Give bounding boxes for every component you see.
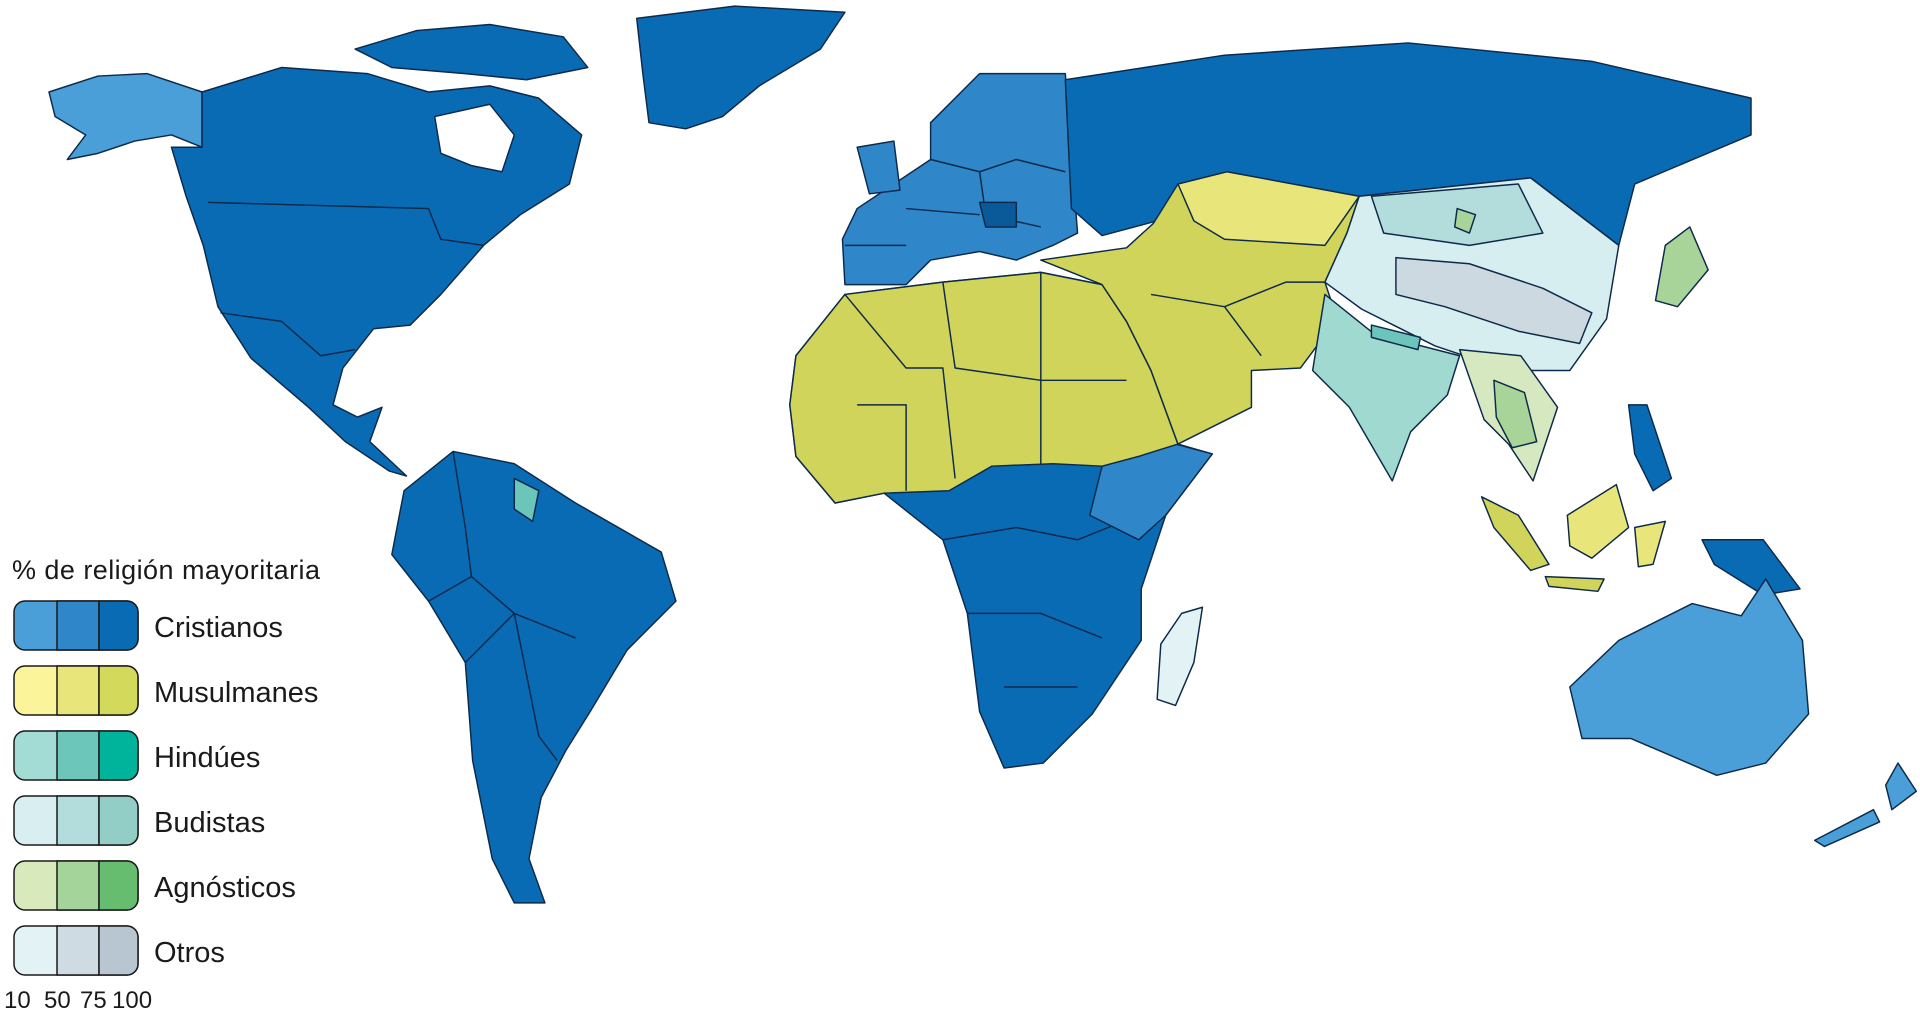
region: Japan — [1656, 227, 1708, 307]
region: Australia — [1570, 579, 1809, 775]
region: North America — [171, 67, 582, 476]
hudson bay — [435, 104, 514, 172]
region: Alaska — [49, 74, 202, 159]
legend title: % de religión mayoritaria — [12, 555, 321, 585]
legend row: Musulmanes: Musulmanes — [154, 677, 318, 709]
region: Madagascar — [1157, 607, 1202, 705]
legend row: Musulmanes — [14, 666, 318, 715]
region: Europe — [842, 74, 1078, 285]
region: Indonesia — [1482, 497, 1549, 570]
region: Russia — [1065, 43, 1751, 245]
legend row: Agnósticos: Agnósticos — [154, 872, 296, 904]
legend scale numbers: 10 — [4, 987, 31, 1014]
region: New Guinea — [1702, 540, 1800, 595]
legend row: Budistas — [14, 796, 265, 845]
arctic islands — [355, 25, 588, 80]
region: SE Asia — [1460, 350, 1558, 481]
region: India — [1313, 294, 1460, 481]
legend row: Cristianos: Cristianos — [154, 612, 283, 644]
region: North Africa muslim — [790, 272, 1178, 503]
region: Greenland — [637, 6, 845, 129]
legend row: Agnósticos — [14, 861, 296, 910]
region: Middle East — [1041, 178, 1359, 444]
region: New Zealand — [1815, 763, 1916, 846]
region: Philippines — [1629, 405, 1671, 491]
legend row: Budistas: Budistas — [154, 807, 265, 839]
region: Africa — [790, 272, 1212, 768]
legend scale numbers: 75 — [80, 987, 107, 1014]
legend row: Cristianos — [14, 601, 283, 650]
legend scale numbers: 100 — [112, 987, 152, 1014]
legend row: Otros: Otros — [154, 937, 225, 969]
region: China — [1325, 178, 1619, 370]
legend row: Otros — [14, 926, 225, 975]
legend row: Hindúes: Hindúes — [154, 742, 260, 774]
legend row: Hindúes — [14, 731, 260, 780]
legend scale numbers — [4, 987, 152, 1014]
legend scale numbers: 50 — [44, 987, 71, 1014]
region: South America — [392, 451, 676, 903]
